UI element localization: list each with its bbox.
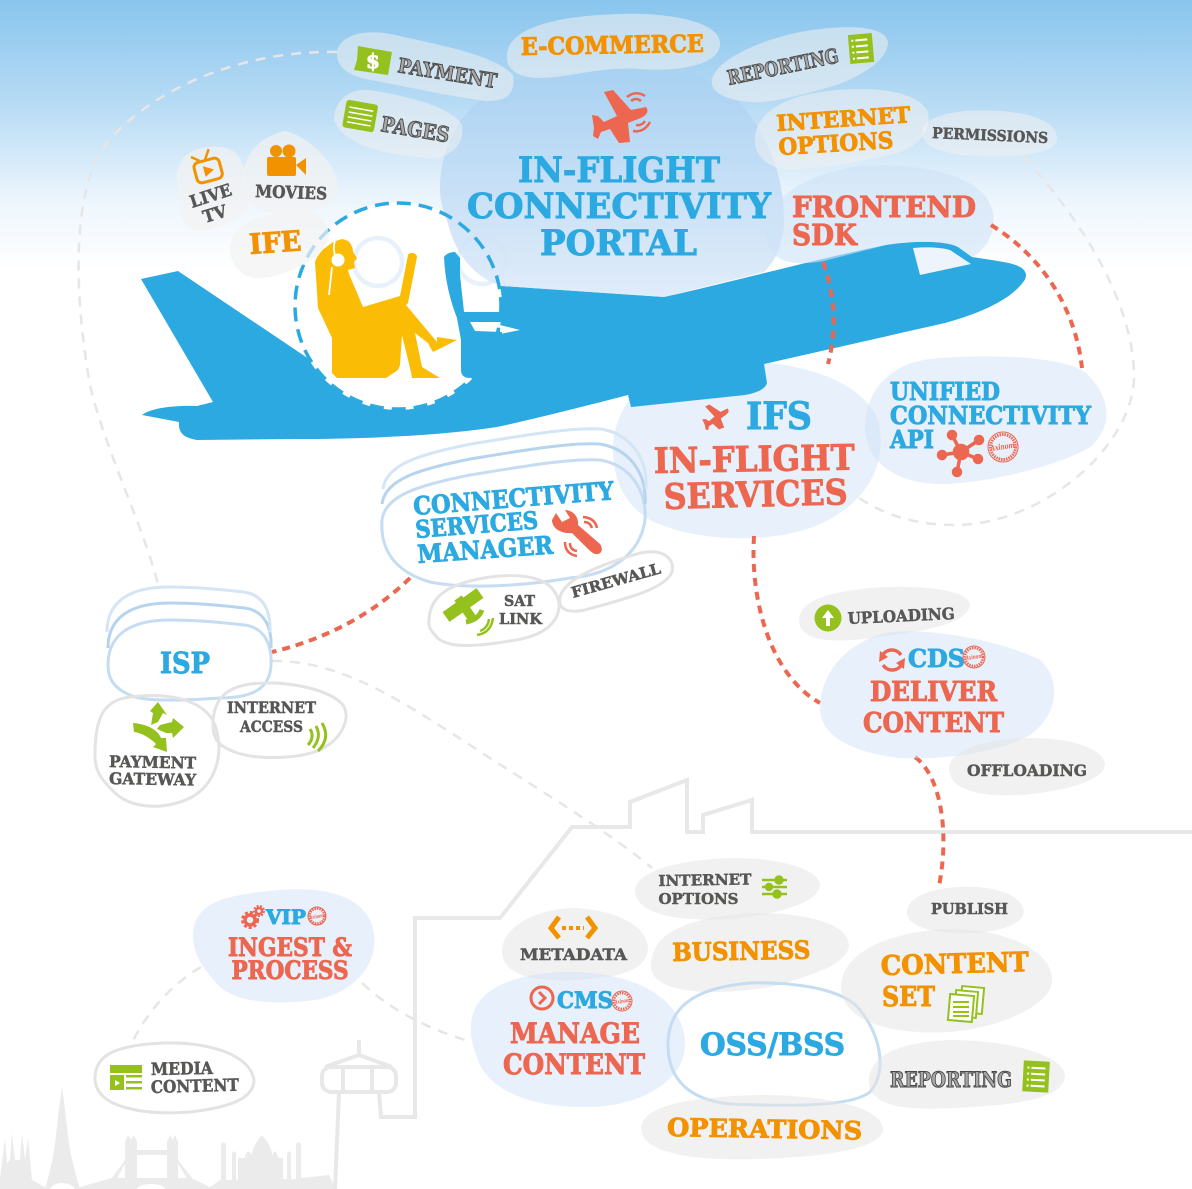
panel: pages: PAGES [379, 111, 451, 147]
panel: frontend sdk: FRONTEND [792, 190, 976, 224]
connector: frontend to ifs [823, 262, 834, 364]
airplane body [141, 242, 1026, 440]
icon: wifi arcs [308, 723, 326, 751]
heading: CONNECTIVITY [467, 186, 772, 227]
panel: cds deliver content: DELIVER [870, 677, 998, 708]
icon: plane with wifi [592, 90, 650, 143]
icon: stamp [988, 432, 1018, 462]
panel: cms manage content: CONTENT [503, 1048, 645, 1081]
panel: reporting bottom: REPORTING [890, 1067, 1012, 1092]
panel: isp [107, 587, 271, 700]
panel: vip ingest and process: PROCESS [232, 956, 348, 985]
panel: payment [337, 32, 513, 101]
panel: vip ingest and process: INGEST & [228, 933, 352, 962]
panel: uploading: UPLOADING [847, 604, 955, 628]
connector: vip to media content [132, 967, 201, 1043]
panel: cds deliver content: CONTENT [863, 708, 1004, 739]
icon: satellite [446, 593, 493, 635]
icon: dollar ticket [354, 46, 392, 75]
panel: reporting top: REPORTING [725, 43, 841, 90]
connector: frontend to unified api [991, 225, 1082, 368]
heading: PORTAL [540, 223, 697, 264]
panel: frontend sdk [766, 165, 993, 263]
panel: e-commerce [507, 14, 720, 78]
panel: cms manage content: CMS [557, 988, 613, 1014]
panel: payment: PAYMENT [396, 53, 499, 93]
panel: internet options lower: OPTIONS [658, 890, 738, 908]
panel: firewall [560, 552, 673, 611]
icon: refresh [879, 650, 905, 670]
panel: unified connectivity api: API [889, 425, 934, 454]
airplane seat [444, 252, 502, 378]
panel: live tv: TV [201, 201, 230, 228]
panel: unified connectivity api [865, 356, 1106, 484]
panel: sat link: SAT [504, 592, 536, 610]
panel: content set: CONTENT [880, 947, 1029, 982]
icon: list [1022, 1060, 1050, 1093]
panel: payment gateway: PAYMENT [109, 752, 196, 773]
panel: metadata: METADATA [520, 945, 628, 964]
panel: reporting bottom [869, 1040, 1065, 1109]
panel: movies [243, 131, 338, 213]
connector: csm to isp [272, 578, 410, 652]
icon: movie camera [267, 144, 306, 176]
connector: payment to isp [79, 52, 337, 585]
panel: connectivity services manager [382, 429, 646, 586]
icon: sliders [762, 876, 787, 898]
panel: media content [95, 1043, 254, 1113]
building outline [379, 780, 1192, 1117]
panel: oss/bss [668, 983, 880, 1105]
heading [467, 150, 772, 264]
panel: publish [907, 887, 1024, 933]
heading: IN-FLIGHT [518, 150, 720, 191]
icon: dollar ticket: $ [366, 49, 380, 73]
panel: in-flight services: IN-FLIGHT [653, 437, 855, 482]
panel: media content: CONTENT [151, 1076, 239, 1098]
icon: stamp [963, 646, 985, 668]
icon: small plane [699, 400, 733, 433]
sky background [0, 0, 1192, 270]
icon: code arrows [551, 917, 595, 938]
panel: pages [334, 90, 462, 158]
passenger window circle [294, 202, 520, 410]
panel: metadata [502, 908, 648, 980]
cockpit window [913, 247, 971, 275]
passenger with laptop [315, 239, 457, 378]
panel: content set [841, 929, 1052, 1032]
panel: connectivity services manager: CONNECTIVITY [412, 476, 616, 521]
panel: vip ingest and process: VIP [265, 905, 306, 929]
panel: content set: SET [882, 982, 935, 1013]
icon: stamp [308, 907, 326, 925]
panel: unified connectivity api: CONNECTIVITY [890, 401, 1092, 430]
panel: live tv: LIVE [187, 180, 234, 213]
panel: operations [641, 1095, 883, 1159]
panel: business [651, 913, 849, 992]
icon: pages [342, 99, 378, 133]
panel: internet options top: OPTIONS [778, 127, 894, 161]
icon: list [848, 33, 874, 64]
panel: offloading [949, 738, 1105, 795]
panel: cms manage content: MANAGE [510, 1017, 640, 1050]
panel: payment gateway [95, 696, 219, 806]
panel: unified connectivity api: UNIFIED [890, 377, 1000, 406]
city skyline silhouette [0, 1085, 336, 1189]
window dashed ring [295, 203, 501, 409]
icon: documents stack [948, 986, 984, 1022]
panel: sat link [429, 576, 559, 646]
panel: in-flight services: SERVICES [663, 472, 848, 518]
panel: media content: MEDIA [151, 1059, 214, 1080]
panel: ife [230, 210, 329, 278]
panel: internet options top: INTERNET [776, 102, 912, 137]
icon: gears [242, 906, 264, 928]
panel: in-flight services: IFS [746, 394, 812, 438]
panel: permissions [922, 110, 1057, 157]
control tower [322, 1040, 396, 1189]
panel: business: BUSINESS [672, 936, 811, 967]
panel: ife: IFE [248, 224, 302, 261]
panel: movies: MOVIES [255, 182, 327, 205]
connector: ifs to cds [754, 536, 820, 703]
panel: isp: ISP [160, 646, 210, 680]
icon: stamp: Axinom [309, 913, 324, 921]
icon: split arrows [133, 702, 184, 752]
icon: stamp: Axinom [614, 998, 630, 1006]
panel: internet options top [755, 89, 929, 169]
panel: offloading: OFFLOADING [967, 761, 1087, 780]
panel: permissions: PERMISSIONS [932, 124, 1049, 147]
icon: circled chevron [531, 987, 553, 1009]
panel: connectivity services manager: SERVICES [414, 505, 539, 544]
panel: oss/bss: OSS/BSS [700, 1027, 845, 1063]
panel: publish: PUBLISH [931, 900, 1008, 918]
panel: uploading [799, 587, 970, 641]
panel: connectivity services manager: MANAGER [416, 531, 554, 569]
panel: sat link: LINK [499, 610, 543, 628]
panel: cms manage content [471, 972, 685, 1107]
icon: stamp: Axinom [965, 653, 983, 662]
connector: cds to publish [915, 757, 943, 886]
panel: internet access [213, 683, 346, 758]
icon: media content [110, 1065, 142, 1090]
connector: isp to internet options [272, 661, 652, 868]
icon: network hub [938, 432, 982, 476]
icon: wrench with wifi [552, 510, 602, 556]
panel: in-flight connectivity portal [440, 70, 784, 297]
panel: frontend sdk: SDK [792, 218, 859, 252]
panel: in-flight services [613, 361, 881, 538]
panel: internet options lower: INTERNET [658, 870, 752, 890]
panel: payment gateway: GATEWAY [109, 769, 197, 790]
connector: vip to cms [362, 983, 472, 1042]
panel: e-commerce: E-COMMERCE [521, 29, 704, 61]
panel: internet access: INTERNET [227, 698, 316, 717]
panel: cds deliver content: CDS [908, 644, 965, 673]
icon: upload arrow [814, 604, 842, 632]
connector: permissions to ifs [859, 157, 1134, 525]
panel: operations: OPERATIONS [667, 1113, 862, 1145]
panel: firewall: FIREWALL [569, 560, 663, 602]
icon: tv [190, 147, 223, 184]
icon: stamp: Axinom [989, 440, 1015, 453]
panel: internet access: ACCESS [239, 717, 303, 736]
panel: internet options lower [635, 858, 820, 920]
panel: live tv [177, 147, 249, 231]
icon: stamp [612, 991, 632, 1011]
panel: reporting top [712, 27, 888, 102]
panel: vip ingest and process [193, 889, 374, 1002]
panel: cds deliver content [820, 631, 1054, 758]
